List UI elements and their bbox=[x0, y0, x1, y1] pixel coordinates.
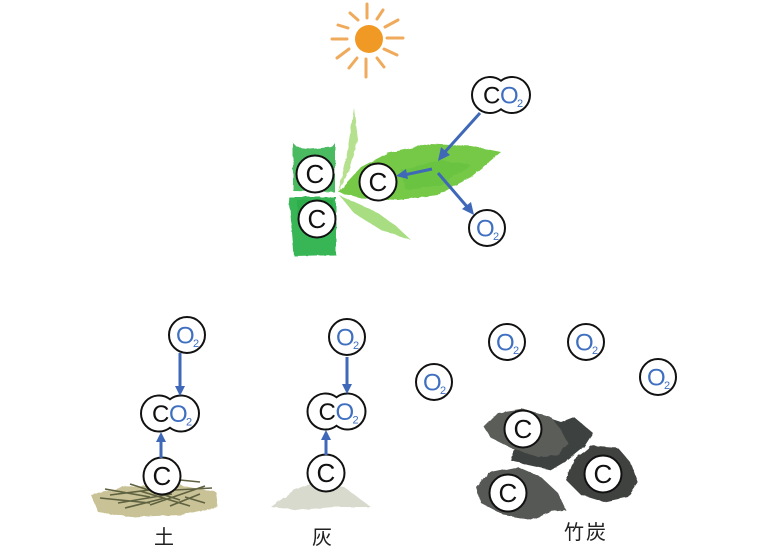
arrow: CO2 into leaf bbox=[438, 113, 480, 161]
illustration: soil with straw bbox=[91, 480, 218, 517]
atom: C on charcoal right bbox=[584, 456, 622, 492]
atom: O2 charcoal 4 bbox=[640, 359, 676, 395]
illustration: bamboo stalk and leaves bbox=[289, 108, 501, 256]
illustration: ash pile bbox=[271, 482, 371, 510]
arrow: carbon to C atom bbox=[396, 169, 432, 179]
label: ash: 灰 bbox=[312, 527, 332, 549]
atom: C on soil bbox=[144, 458, 180, 494]
atom: CO2 top bbox=[472, 77, 530, 113]
atom: C in lower stalk bbox=[298, 200, 336, 238]
atom: C on ash bbox=[308, 454, 344, 492]
atom: O2 released bbox=[469, 210, 505, 246]
atom: O2 charcoal 2 bbox=[489, 324, 525, 360]
atom: C in leaf bbox=[360, 164, 396, 200]
arrow: O2 to CO2 soil bbox=[175, 353, 185, 396]
icon: sun bbox=[332, 4, 403, 77]
atom: O2 soil bbox=[169, 317, 205, 353]
arrow: C to CO2 ash bbox=[321, 430, 331, 455]
atom: O2 charcoal 1 bbox=[416, 364, 452, 400]
label: bamboo charcoal: 竹炭 bbox=[564, 521, 608, 544]
illustration: bamboo charcoal bbox=[476, 409, 638, 520]
arrow: C to CO2 soil bbox=[156, 432, 166, 458]
arrow: oxygen out bbox=[438, 173, 474, 215]
atom: CO2 ash bbox=[308, 394, 365, 430]
label: soil: 土 bbox=[154, 526, 174, 549]
atom: C in upper stalk bbox=[296, 156, 334, 192]
atom: O2 charcoal 3 bbox=[568, 324, 604, 360]
atom: CO2 soil bbox=[141, 396, 199, 432]
atom: C on charcoal top bbox=[504, 410, 542, 448]
atom: C on charcoal left bbox=[490, 474, 526, 512]
atom: O2 ash bbox=[329, 319, 365, 355]
arrow: O2 to CO2 ash bbox=[342, 357, 352, 394]
